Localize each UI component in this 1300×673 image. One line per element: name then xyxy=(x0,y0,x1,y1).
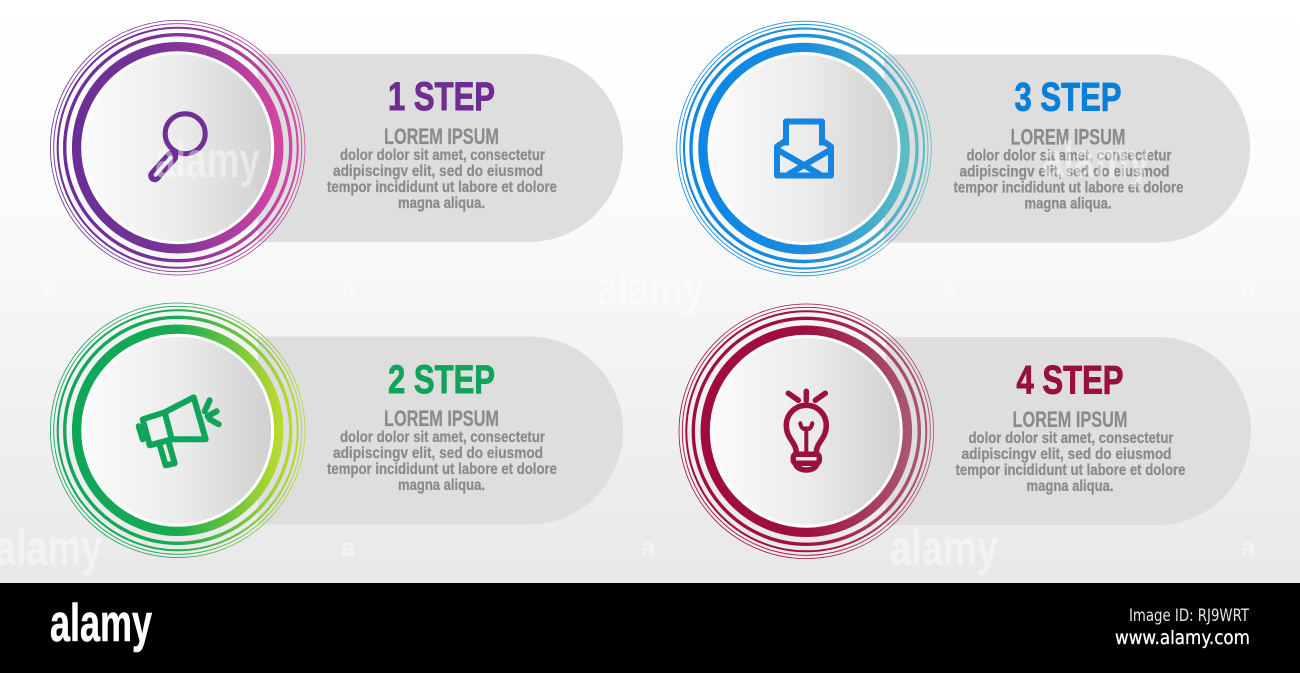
text block: step 1: adipiscingv elit, sed do eiusmod xyxy=(333,163,543,180)
text block: step 4: tempor incididunt ut labore et dolore xyxy=(956,462,1186,479)
text block: step 2 xyxy=(327,406,557,494)
watermarks: a xyxy=(641,532,656,562)
footer logo: alamy xyxy=(50,594,152,653)
watermarks: a xyxy=(941,272,956,302)
watermarks: a xyxy=(42,272,57,302)
disc: step 4 xyxy=(711,336,901,526)
website: www.alamy.com xyxy=(1115,627,1250,649)
text block: step 4: magna aliqua. xyxy=(1026,478,1114,495)
text block: step 3: tempor incididunt ut labore et dolore xyxy=(954,180,1184,196)
watermarks: alamy xyxy=(890,520,998,576)
watermarks: alamy xyxy=(1042,132,1150,188)
watermarks: a xyxy=(341,532,356,562)
text block: step 4: adipiscingv elit, sed do eiusmod xyxy=(962,446,1172,463)
icon: envelope xyxy=(777,122,831,176)
rings: step 3 xyxy=(677,21,931,276)
heading: 2 STEP: 2 STEP xyxy=(388,358,495,402)
text block: step 2: LOREM IPSUM xyxy=(384,406,499,431)
watermarks: alamy xyxy=(155,132,260,188)
panel: step 2 xyxy=(50,303,623,558)
panel: step 4 xyxy=(679,304,1251,559)
rings: step 4 xyxy=(679,304,934,559)
footer bar xyxy=(0,583,1300,673)
text block: step 4 xyxy=(956,407,1186,495)
rings: step 2 xyxy=(50,303,305,558)
text block: step 4: dolor dolor sit amet, consectetur xyxy=(968,430,1174,447)
text block: step 4: LOREM IPSUM xyxy=(1012,407,1128,432)
text block: step 1: magna aliqua. xyxy=(398,195,485,212)
text block: step 1: LOREM IPSUM xyxy=(384,124,499,149)
disc: step 1 xyxy=(83,53,273,243)
watermarks: a xyxy=(1241,272,1256,302)
text block: step 2: dolor dolor sit amet, consectetur xyxy=(340,429,545,446)
pill: step 3 xyxy=(884,54,1250,242)
heading: 4 STEP: 4 STEP xyxy=(1016,358,1124,402)
icon: light bulb xyxy=(786,391,826,470)
text block: step 3: dolor dolor sit amet, consectetur xyxy=(966,148,1172,164)
watermarks: a xyxy=(341,272,356,302)
text block: step 1: dolor dolor sit amet, consectetur xyxy=(340,147,545,164)
text block: step 1: tempor incididunt ut labore et dolore xyxy=(327,179,557,196)
disc: step 2 xyxy=(83,335,273,525)
watermarks xyxy=(0,132,1256,576)
text block: step 2: magna aliqua. xyxy=(398,477,485,494)
text block: step 3: adipiscingv elit, sed do eiusmod xyxy=(960,164,1170,180)
rings: step 1 xyxy=(50,20,305,275)
text block: step 2: tempor incididunt ut labore et dolore xyxy=(327,461,557,478)
text block: step 3: LOREM IPSUM xyxy=(1010,124,1126,150)
icon: megaphone xyxy=(139,397,219,465)
text block: step 2: adipiscingv elit, sed do eiusmod xyxy=(333,445,543,462)
text block: step 3: magna aliqua. xyxy=(1024,196,1112,212)
text block: step 1 xyxy=(327,124,557,212)
panel: step 1 xyxy=(50,20,623,275)
pill: step 4 xyxy=(886,337,1251,525)
disc: step 3 xyxy=(709,54,899,244)
heading: 3 STEP: 3 STEP xyxy=(1014,76,1122,120)
pill: step 2 xyxy=(258,336,623,524)
heading: 1 STEP: 1 STEP xyxy=(388,75,495,119)
image id: Image ID: RJ9WRT xyxy=(1129,606,1249,626)
watermarks: alamy xyxy=(597,260,704,316)
pill: step 1 xyxy=(258,54,623,242)
watermarks: a xyxy=(1241,532,1256,562)
text block: step 3 xyxy=(954,124,1184,212)
icon: magnifying glass xyxy=(155,114,205,176)
panel: step 3 xyxy=(677,21,1250,276)
